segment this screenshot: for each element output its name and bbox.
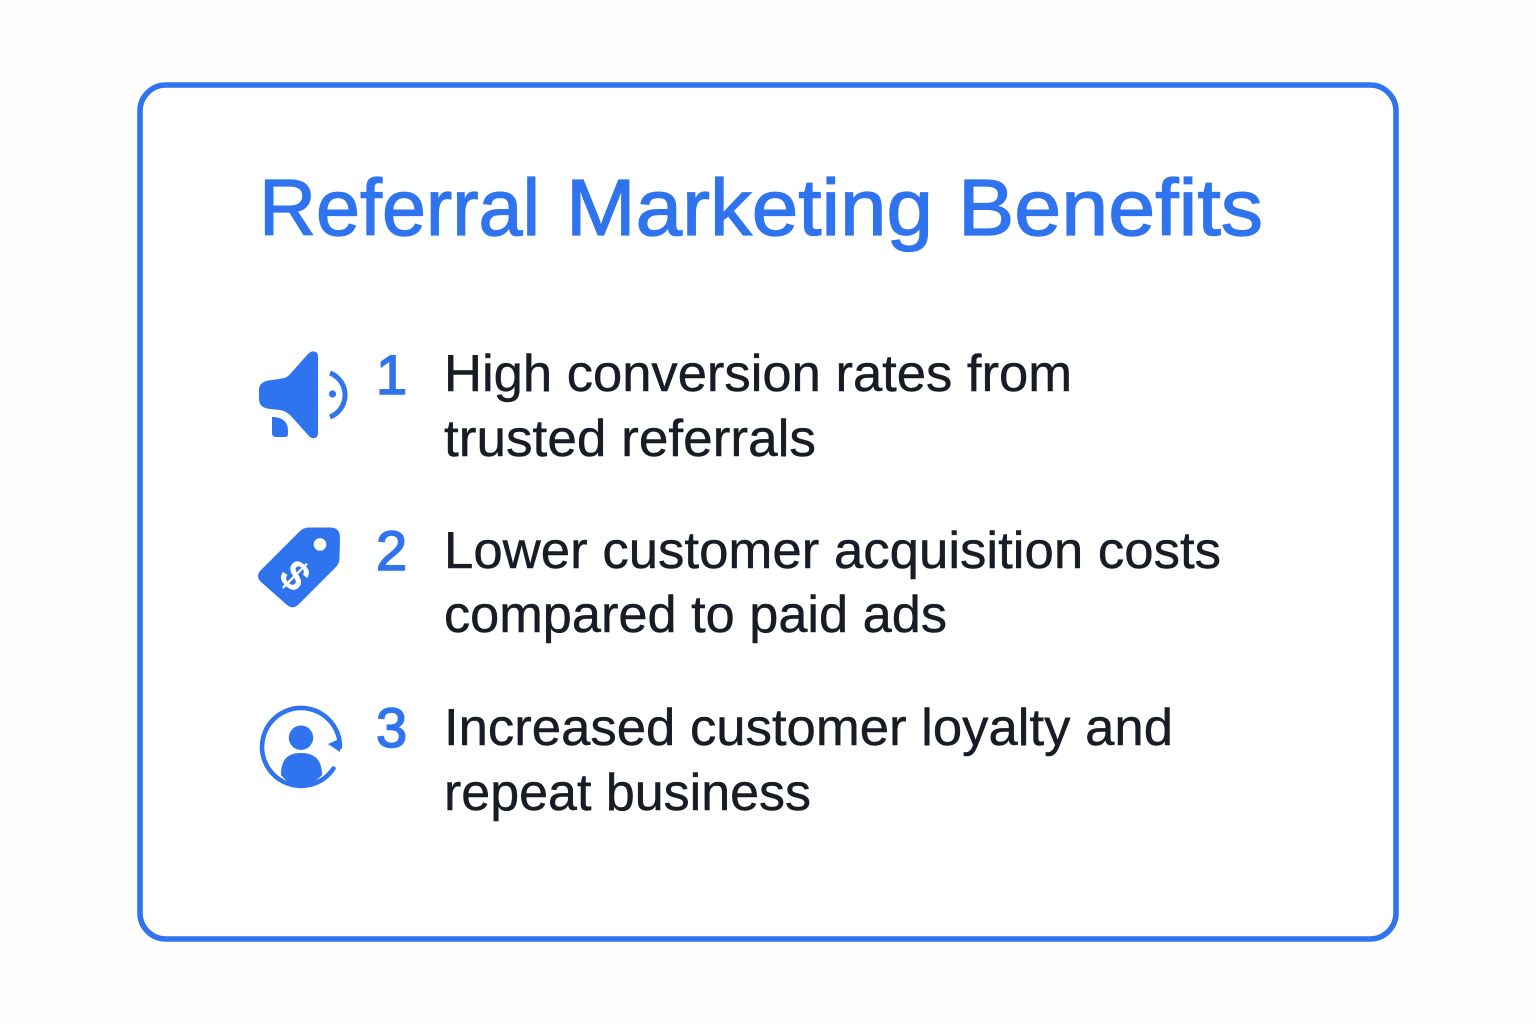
text: benefit 1: High conversion rates from xyxy=(444,345,1072,403)
benefit 3 xyxy=(262,696,1173,822)
icon: price tag xyxy=(258,528,340,607)
icon: megaphone xyxy=(259,351,345,438)
icon: returning customer xyxy=(262,708,342,786)
panel: card xyxy=(140,85,1396,939)
number 3: 3 xyxy=(376,696,407,759)
text: benefit 1: trusted referrals xyxy=(444,410,816,468)
title: Referral xyxy=(259,163,540,252)
title: Marketing xyxy=(566,163,933,252)
icon: price tag: $ xyxy=(270,550,320,600)
benefit 2 xyxy=(258,519,1221,644)
text: benefit 3: Increased customer loyalty and xyxy=(444,699,1173,757)
text: benefit 3: repeat business xyxy=(444,764,811,822)
title: Benefits xyxy=(958,163,1263,252)
benefit 1 xyxy=(259,343,1072,468)
number 1: 1 xyxy=(376,343,407,406)
text: benefit 2: Lower customer acquisition costs xyxy=(444,522,1221,580)
number 2: 2 xyxy=(376,519,407,582)
text: benefit 2: compared to paid ads xyxy=(444,586,947,644)
